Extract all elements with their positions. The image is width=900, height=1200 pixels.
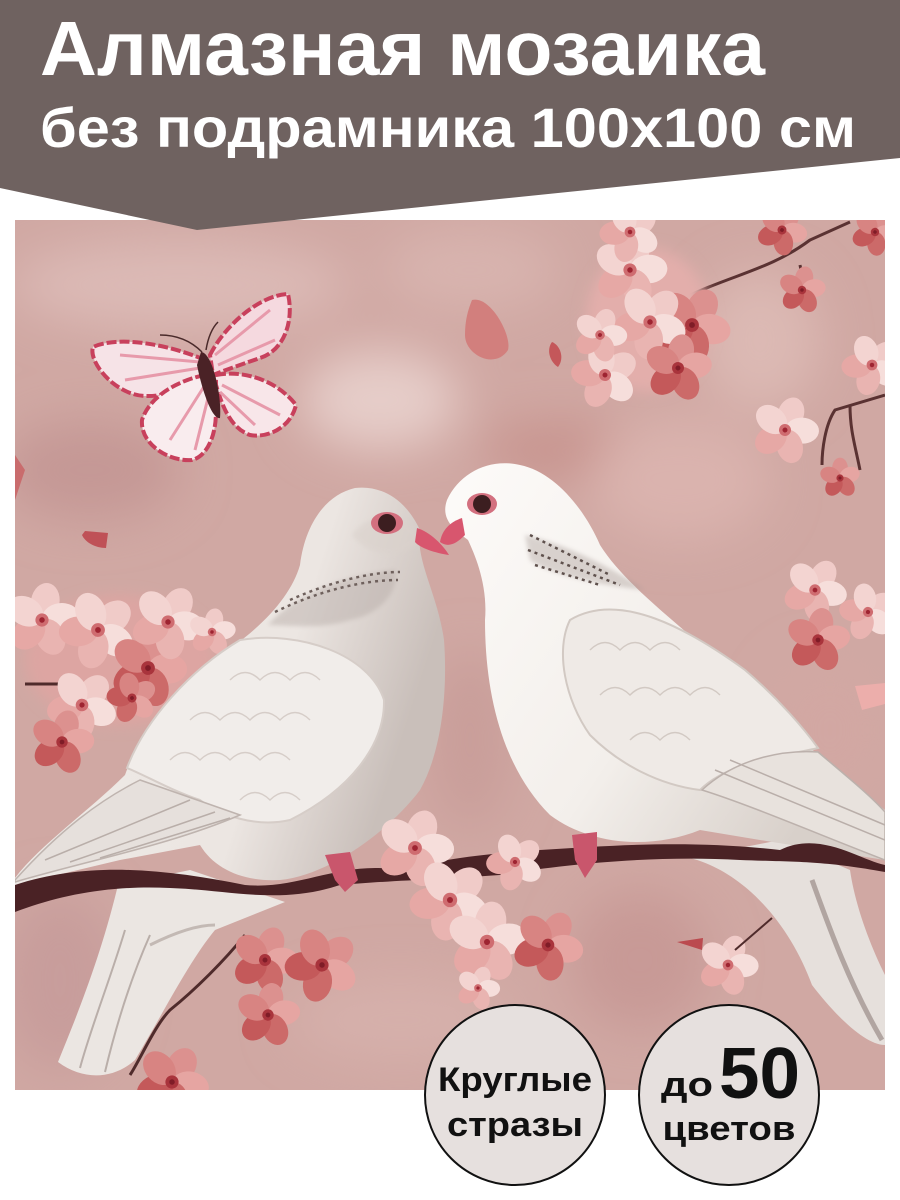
main branch	[15, 832, 885, 912]
blossoms left	[15, 583, 236, 773]
dove feet	[325, 852, 358, 892]
badge: round rhinestones: Круглые	[438, 1061, 592, 1099]
blossoms upper right	[15, 187, 900, 710]
subtitle: без подрамника 100х100 см	[40, 96, 856, 159]
loose petals	[15, 300, 885, 710]
right dove	[440, 463, 885, 860]
picture background	[0, 220, 890, 1090]
right dove face	[467, 493, 497, 515]
left dove wing	[127, 638, 384, 822]
picture: doves on a blossom branch	[15, 220, 885, 1090]
left dove face	[352, 517, 420, 554]
header banner	[0, 0, 900, 230]
right dove wing	[563, 610, 818, 790]
butterfly	[92, 294, 296, 460]
branch blossoms	[380, 810, 583, 1010]
right dove tail	[690, 840, 885, 1045]
badge: up to 50 colors: 50	[719, 1034, 800, 1114]
badge: up to 50 colors: до	[661, 1066, 713, 1104]
badge: up to 50 colors: цветов	[662, 1110, 796, 1148]
badge: round rhinestones: стразы	[447, 1106, 583, 1144]
title: Алмазная мозаика	[40, 6, 766, 92]
left dove tail	[58, 870, 285, 1075]
lower blossoms	[118, 910, 772, 1135]
badge: up to 50 colors	[639, 1005, 819, 1185]
badge: round rhinestones	[425, 1005, 605, 1185]
left dove	[15, 488, 449, 885]
